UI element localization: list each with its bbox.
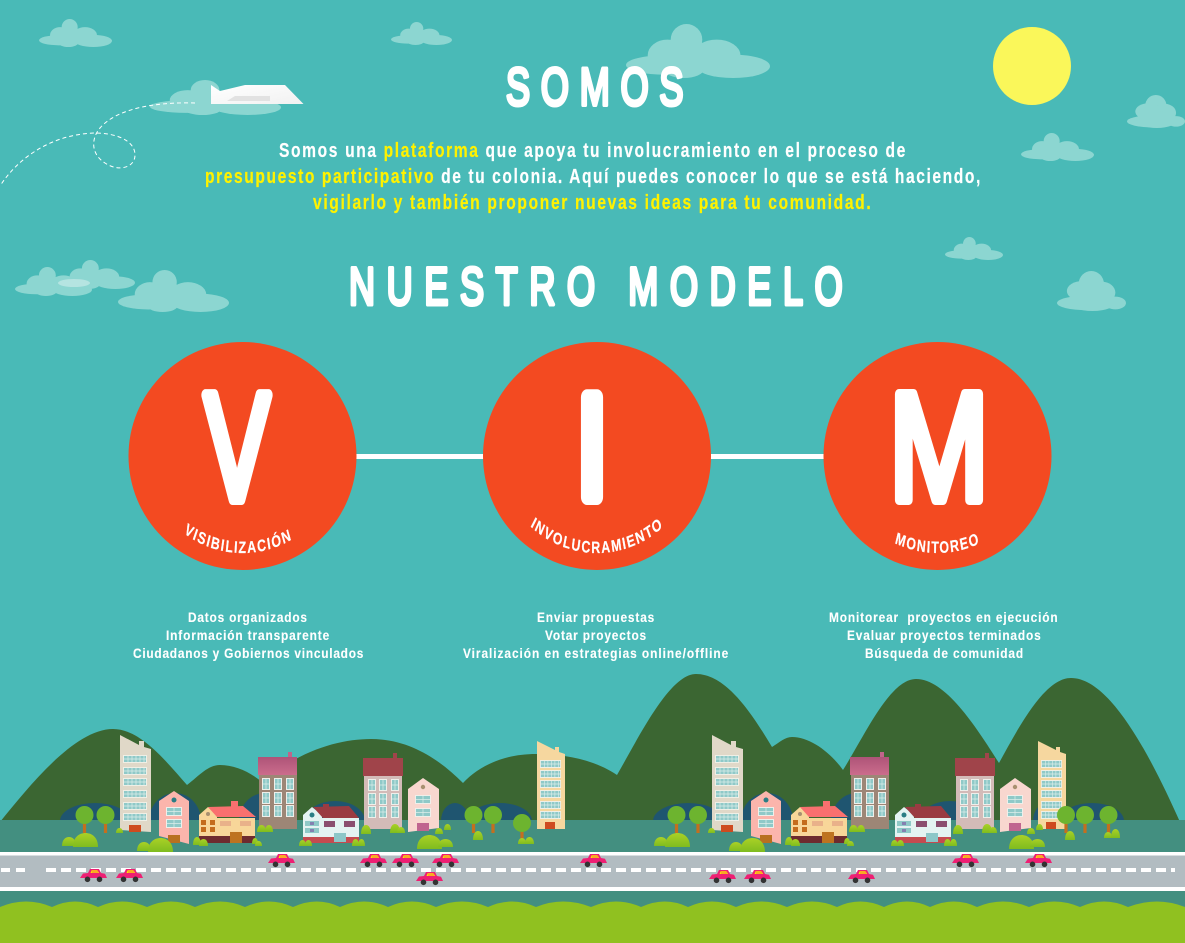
text block: Monitoreo: Evaluar proyectos terminados: [847, 627, 1041, 643]
heading: NUESTRO MODELO: NUESTRO MODELO: [349, 257, 843, 316]
intro paragraph: vigilarlo y también proponer nuevas ideas para tu comunidad.: [313, 191, 871, 213]
trees: [76, 806, 1118, 841]
intro paragraph: [205, 139, 980, 213]
text block: Visibilización: Ciudadanos y Gobiernos vinculados: [133, 645, 363, 661]
text block: Visibilización: Datos organizados: [188, 609, 307, 625]
road: [0, 852, 1185, 891]
intro paragraph: presupuesto participativo de tu colonia. Aquí puedes conocer lo que se está haciendo,: [205, 165, 980, 187]
circle: I Involucramiento: I: [577, 367, 607, 529]
circle: M Monitoreo: MONITOREO: [895, 532, 978, 554]
green hedge foreground: [0, 902, 1185, 943]
circle: V Visibilización: [128, 342, 356, 570]
text block: Visibilización: [133, 609, 363, 661]
text block: Involucramiento: Votar proyectos: [545, 627, 646, 643]
heading: SOMOS: SOMOS: [506, 57, 683, 117]
dashed flight path: [0, 103, 195, 186]
circle: V Visibilización: V: [205, 362, 269, 531]
circle: I Involucramiento: INVOLUCRAMIENTO: [530, 517, 661, 554]
ground: [0, 820, 1185, 910]
connector lines: [350, 454, 830, 459]
text block: Monitoreo: Búsqueda de comunidad: [865, 645, 1023, 661]
left town buildings: [120, 735, 565, 844]
icon: sun: [993, 27, 1071, 105]
intro paragraph: Somos una plataforma que apoya tu involucramiento en el proceso de: [279, 139, 905, 161]
mountains: [0, 674, 1180, 822]
cars: [80, 854, 1052, 885]
text block: Involucramiento: Viralización en estrategias online/offline: [463, 645, 728, 661]
right town buildings: [712, 735, 1066, 844]
text block: Monitoreo: Monitorear proyectos en ejecución: [829, 609, 1058, 625]
text block: Monitoreo: [829, 609, 1058, 661]
text block: Involucramiento: [463, 609, 728, 661]
bushes: [62, 824, 1120, 852]
clouds: [15, 19, 1185, 312]
text block: Visibilización: Información transparente: [166, 627, 329, 643]
circle: V Visibilización: VISIBILIZACIÓN: [186, 522, 291, 554]
text block: Involucramiento: Enviar propuestas: [537, 609, 654, 625]
circle: M Monitoreo: M: [889, 362, 989, 533]
distant blue hills: [60, 793, 1124, 849]
circle: M Monitoreo: [824, 342, 1052, 570]
icon: paper plane: [211, 85, 304, 104]
circle: I Involucramiento: [483, 342, 711, 570]
